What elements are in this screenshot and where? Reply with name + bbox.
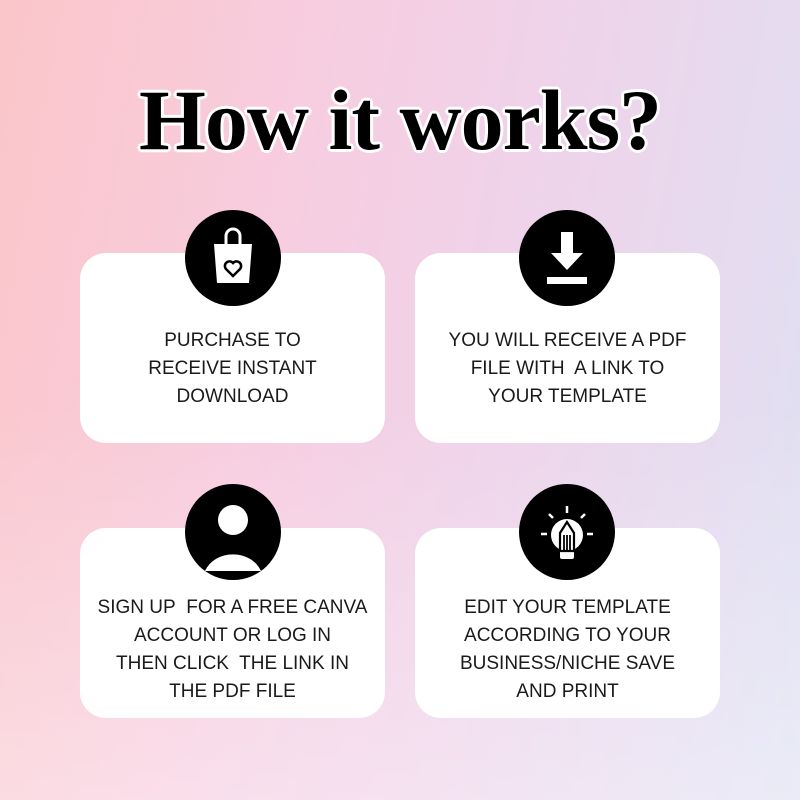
text 3: THEN CLICK THE LINK IN — [116, 653, 349, 674]
title: How it works? — [139, 72, 661, 168]
text 2: YOU WILL RECEIVE A PDF — [449, 330, 686, 351]
text 4: ACCORDING TO YOUR — [464, 625, 671, 646]
text 3: ACCOUNT OR LOG IN — [134, 625, 331, 646]
text 4 — [460, 597, 675, 702]
text 3: SIGN UP FOR A FREE CANVA — [98, 597, 367, 618]
text 2 — [449, 330, 686, 407]
text 1 — [148, 330, 317, 407]
text 3: THE PDF FILE — [169, 681, 296, 702]
text 1: RECEIVE INSTANT — [148, 358, 317, 379]
card 1 — [80, 253, 385, 443]
text 3 — [98, 597, 368, 702]
card 2 — [415, 253, 720, 443]
text 4: EDIT YOUR TEMPLATE — [464, 597, 671, 618]
card 4 — [415, 528, 720, 718]
text 2: YOUR TEMPLATE — [488, 386, 647, 407]
icon: bulb pencil — [519, 484, 615, 580]
text 1: PURCHASE TO — [164, 330, 301, 351]
text 2: FILE WITH A LINK TO — [471, 358, 664, 379]
text 1: DOWNLOAD — [177, 386, 288, 407]
text 4: AND PRINT — [516, 681, 619, 702]
icon: download — [519, 210, 615, 306]
text 4: BUSINESS/NICHE SAVE — [460, 653, 675, 674]
icon: user — [185, 484, 281, 580]
card 3 — [80, 528, 385, 718]
icon: shopping bag — [185, 210, 281, 306]
